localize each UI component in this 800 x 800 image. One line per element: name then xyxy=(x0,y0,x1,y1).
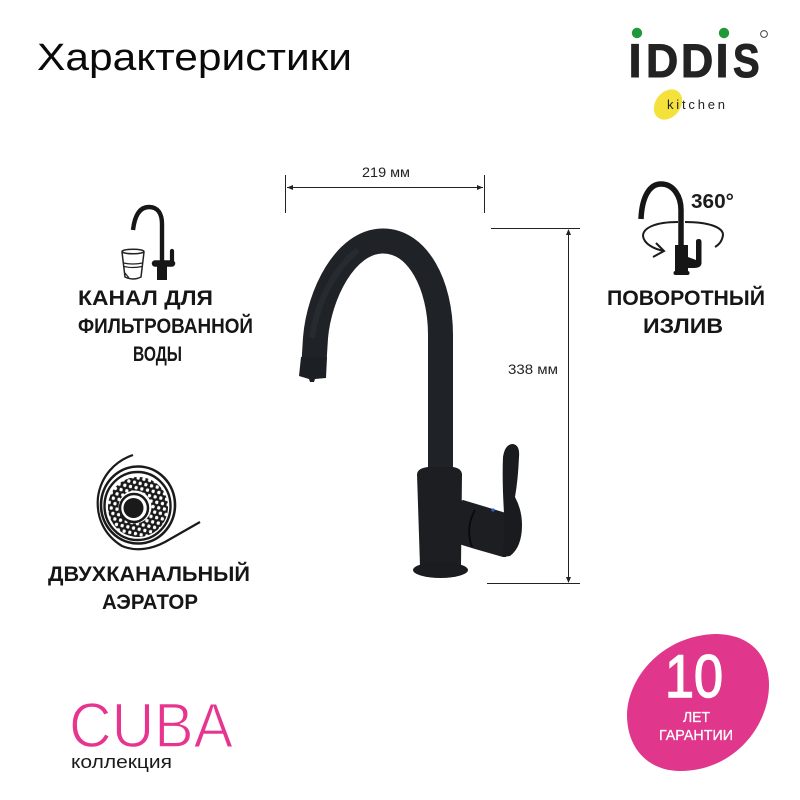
warranty badge: ЛЕТ xyxy=(683,709,710,726)
logo: IDDIS kitchen: S xyxy=(733,36,760,88)
warranty badge xyxy=(627,634,769,771)
logo: IDDIS kitchen: D xyxy=(646,35,678,87)
label: filtered water channel: КАНАЛ ДЛЯ xyxy=(78,286,213,310)
logo: IDDIS kitchen: I xyxy=(716,34,729,87)
logo: IDDIS kitchen: kitchen xyxy=(667,97,725,112)
icon: faucet with glass xyxy=(122,207,172,280)
spout xyxy=(314,241,440,472)
body xyxy=(417,467,462,566)
label: swivel spout: ПОВОРОТНЫЙ xyxy=(607,285,765,310)
label: filtered water channel xyxy=(78,286,253,366)
dimension: height 338 mm: 338 мм xyxy=(508,362,558,377)
logo: IDDIS kitchen xyxy=(628,28,767,125)
label: filtered water channel: ВОДЫ xyxy=(133,342,182,366)
label: swivel spout: ИЗЛИВ xyxy=(643,314,723,338)
label: filtered water channel: ФИЛЬТРОВАННОЙ xyxy=(78,313,253,338)
faucet xyxy=(299,241,522,578)
label: dual-channel aerator xyxy=(48,561,250,614)
label: dual-channel aerator: АЭРАТОР xyxy=(102,590,198,614)
collection name: CUBA xyxy=(69,691,233,761)
nozzle xyxy=(299,357,327,382)
title: Характеристики xyxy=(37,37,352,79)
dimension: height 338 mm xyxy=(487,228,580,584)
logo: IDDIS kitchen: I xyxy=(628,34,642,87)
icon: rotating spout 360 xyxy=(641,184,734,275)
dimension: width 219 mm xyxy=(286,165,484,213)
handle connector xyxy=(432,500,506,557)
lever xyxy=(503,444,522,557)
label: swivel spout xyxy=(607,285,765,338)
icon: aerator xyxy=(98,455,200,549)
label: dual-channel aerator: ДВУХКАНАЛЬНЫЙ xyxy=(48,561,250,586)
logo: IDDIS kitchen: D xyxy=(681,35,713,87)
warranty badge: 10 xyxy=(665,643,723,710)
base xyxy=(413,562,468,578)
collection name: коллекция xyxy=(71,752,172,772)
warranty badge: ГАРАНТИИ xyxy=(659,727,733,744)
dimension: width 219 mm: 219 мм xyxy=(362,165,410,180)
icon: rotating spout 360: 360° xyxy=(691,191,734,213)
